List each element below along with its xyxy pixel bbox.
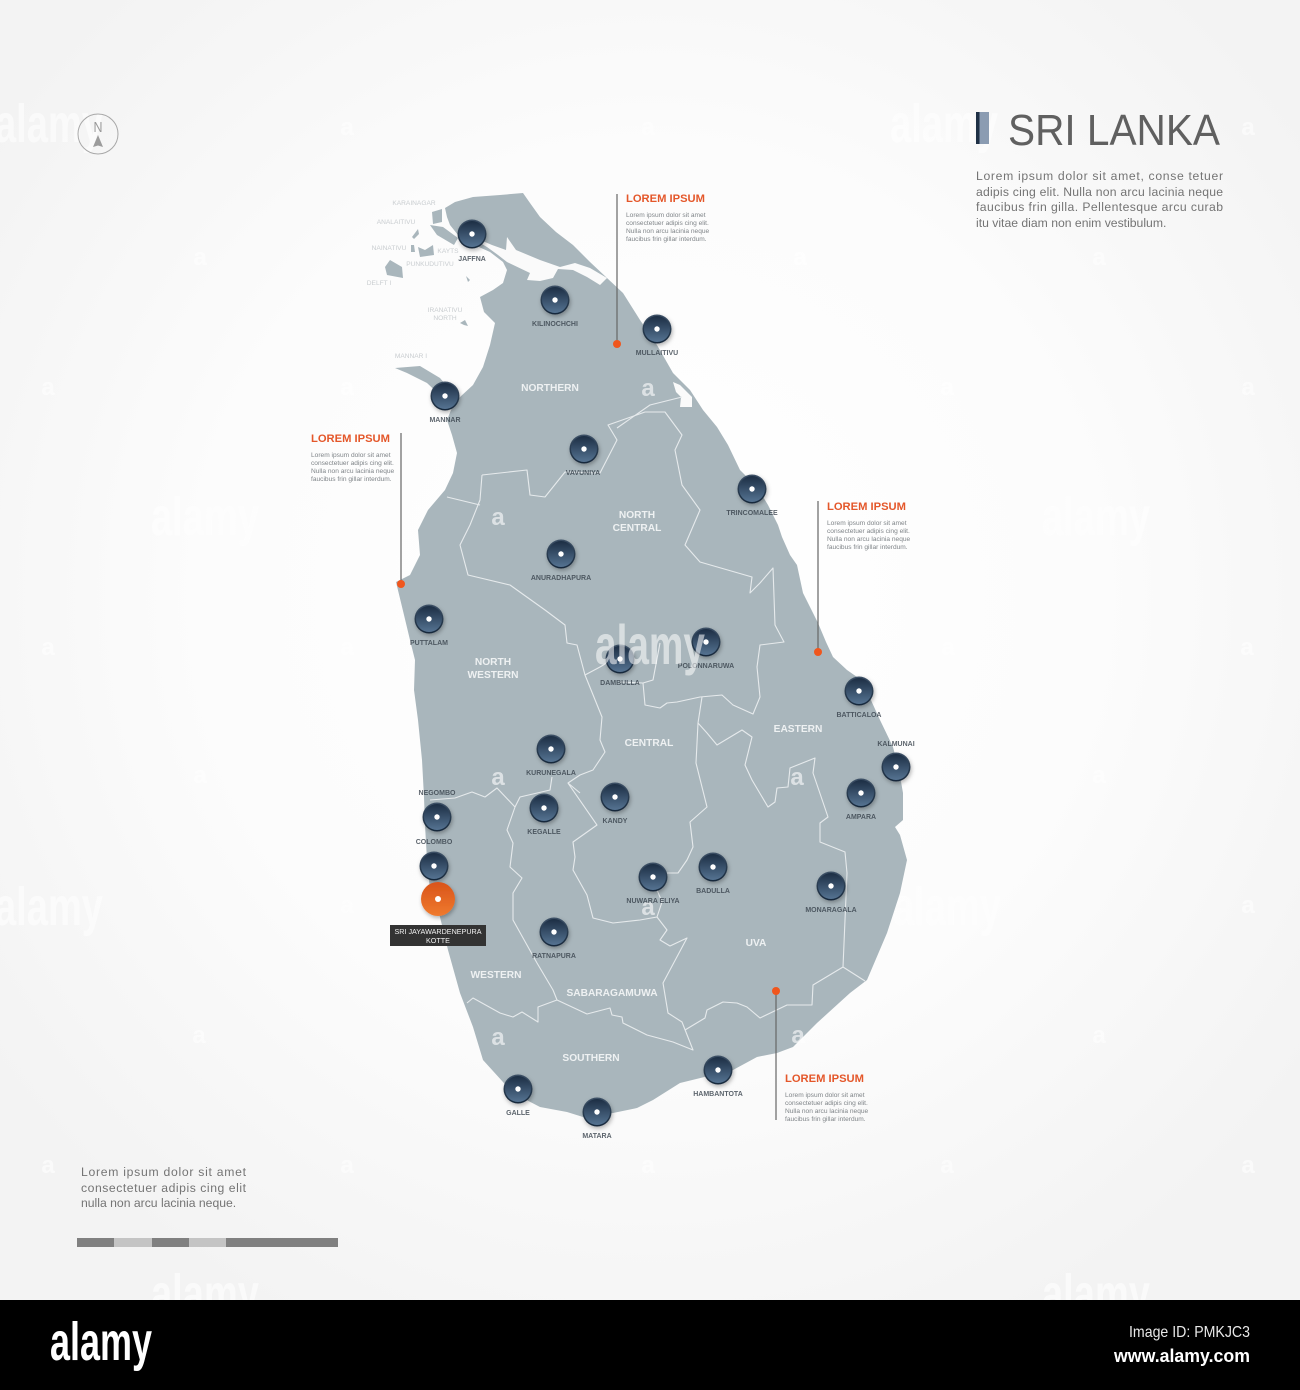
pin: Galle: GALLE — [506, 1110, 530, 1117]
callout: south: LOREM IPSUM — [785, 1073, 864, 1085]
watermarks on map: a — [790, 764, 804, 791]
region names: NORTH — [475, 657, 511, 668]
pin: Ratnapura — [532, 918, 576, 960]
watermarks on map: a — [491, 504, 505, 531]
watermarks: a — [941, 634, 955, 661]
callout: west — [311, 433, 405, 588]
pin: Kilinochchi: KILINOCHCHI — [532, 321, 578, 328]
region names: NORTHERN — [521, 383, 579, 394]
footnote text — [81, 1165, 247, 1210]
watermarks: a — [340, 892, 354, 919]
capital marker: Sri Jayawardenepura Kotte — [390, 882, 486, 946]
footer bar: Image ID: PMKJC3 — [1129, 1324, 1250, 1341]
watermarks on map: a — [491, 1024, 505, 1051]
pin: Mannar: MANNAR — [429, 417, 461, 424]
watermarks: alamy — [1042, 487, 1150, 547]
callout: east: Nulla non arcu lacinia neque — [827, 536, 911, 543]
footer bar — [0, 1300, 1300, 1390]
label: offshore island names: NORTH — [433, 315, 457, 322]
watermarks: a — [793, 244, 807, 271]
watermarks: alamy — [151, 1264, 259, 1324]
label: offshore island names: ANALAITIVU — [377, 219, 415, 226]
pin: Ampara — [846, 778, 876, 821]
intro text: adipis cing elit. Nulla non arcu lacinia neque — [976, 185, 1223, 199]
map: province borders — [430, 397, 865, 1050]
watermarks: a — [41, 374, 55, 401]
pin: Nuwara Eliya: NUWARA ELIYA — [626, 898, 680, 905]
pin: Dambulla: DAMBULLA — [600, 680, 640, 687]
label: offshore island names: KAYTS — [437, 248, 459, 255]
callout: south — [772, 987, 869, 1123]
pin: Batticaloa — [837, 676, 881, 719]
watermarks: a — [641, 114, 655, 141]
watermark over central map: alamy — [595, 613, 705, 676]
watermarks: alamy — [1042, 1264, 1150, 1324]
watermarks: a — [1092, 762, 1106, 789]
label: offshore island names: KARAINAGAR — [392, 200, 436, 207]
callout: north: Lorem ipsum dolor sit amet — [626, 212, 706, 219]
map: eastern lagoon — [673, 382, 692, 407]
callout: north: faucibus frin gillar interdum. — [626, 236, 707, 243]
watermarks: a — [340, 634, 354, 661]
watermarks: a — [1092, 244, 1106, 271]
callout: east — [814, 501, 911, 656]
capital marker: Sri Jayawardenepura Kotte: SRI JAYAWARDENEPURA — [394, 927, 482, 936]
region names: CENTRAL — [625, 738, 673, 749]
pin: Batticaloa: BATTICALOA — [837, 712, 881, 719]
callout: east: consectetuer adipis cing elit. — [827, 528, 910, 535]
watermarks: a — [340, 374, 354, 401]
watermarks: a — [193, 244, 207, 271]
watermarks: alamy — [890, 94, 998, 154]
footnote text: consectetuer adipis cing elit — [81, 1181, 247, 1195]
watermarks on map: a — [791, 1022, 805, 1049]
pin: Kalmunai: KALMUNAI — [877, 741, 915, 748]
pin: Kilinochchi — [532, 286, 578, 328]
callout: east: LOREM IPSUM — [827, 501, 906, 513]
pin: Kandy: KANDY — [603, 818, 628, 825]
watermarks: a — [1241, 1152, 1255, 1179]
compass: N — [94, 119, 102, 136]
pin: Anuradhapura: ANURADHAPURA — [531, 575, 591, 582]
callout: west: Lorem ipsum dolor sit amet — [311, 452, 391, 459]
callout: west: Nulla non arcu lacinia neque — [311, 468, 395, 475]
pin: Hambantota — [693, 1056, 743, 1098]
callout: north: consectetuer adipis cing elit. — [626, 220, 709, 227]
footnote text: nulla non arcu lacinia neque. — [81, 1196, 236, 1210]
watermarks: a — [340, 1152, 354, 1179]
pin: Badulla — [696, 852, 730, 895]
watermarks: a — [1241, 374, 1255, 401]
pin: Vavuniya: VAVUNIYA — [566, 470, 600, 477]
map: mainland and Jaffna peninsula — [396, 193, 907, 1117]
intro text — [976, 169, 1223, 230]
watermarks on map — [491, 375, 805, 1051]
callout: north: Nulla non arcu lacinia neque — [626, 228, 710, 235]
watermarks: a — [940, 1152, 954, 1179]
watermarks: a — [1241, 892, 1255, 919]
callout: south: faucibus frin gillar interdum. — [785, 1116, 866, 1123]
label: offshore island names — [367, 200, 463, 360]
capital marker: Sri Jayawardenepura Kotte: KOTTE — [426, 936, 450, 945]
pin: Mullaitivu — [636, 314, 678, 357]
map: lagoon — [458, 232, 607, 285]
region names — [468, 383, 822, 1064]
label: offshore island names: IRANATIVU — [428, 307, 463, 314]
pin: Hambantota: HAMBANTOTA — [693, 1091, 743, 1098]
pin: Kegalle — [527, 794, 561, 836]
region names: EASTERN — [774, 724, 822, 735]
pin: Mannar — [429, 382, 461, 424]
pin: Nuwara Eliya — [626, 862, 680, 905]
scale bar — [77, 1238, 338, 1247]
watermarks: a — [41, 634, 55, 661]
watermarks: a — [641, 1152, 655, 1179]
compass — [78, 114, 118, 154]
pin: Polonnaruwa — [678, 628, 734, 670]
pin: Kandy — [600, 782, 630, 825]
map: islands — [385, 209, 470, 400]
watermarks: a — [1092, 1022, 1106, 1049]
callout: south: Nulla non arcu lacinia neque — [785, 1108, 869, 1115]
watermarks on map: a — [641, 894, 655, 921]
pin: Negombo — [419, 790, 456, 832]
watermarks: a — [41, 1152, 55, 1179]
pin: Colombo — [416, 839, 453, 880]
region names: WESTERN — [468, 670, 518, 681]
footer bar: alamy — [50, 1312, 152, 1372]
callout: west: LOREM IPSUM — [311, 433, 390, 445]
pin: Polonnaruwa: POLONNARUWA — [678, 663, 734, 670]
pin: Matara — [582, 1098, 612, 1140]
label: offshore island names: NAINATIVU — [372, 245, 407, 252]
footer bar: www.alamy.com — [1113, 1346, 1250, 1366]
watermarks: a — [193, 762, 207, 789]
watermarks: a — [1240, 634, 1254, 661]
intro text: Lorem ipsum dolor sit amet, conse tetuer — [976, 169, 1223, 183]
label: offshore island names: PUNKUDUTIVU — [406, 261, 454, 268]
pin: Galle — [504, 1074, 532, 1117]
region names: NORTH — [619, 510, 655, 521]
callout: south: Lorem ipsum dolor sit amet — [785, 1092, 865, 1099]
intro text: itu vitae diam non enim vestibulum. — [976, 216, 1166, 230]
pin: Negombo: NEGOMBO — [419, 790, 456, 797]
pin: Trincomalee — [726, 474, 778, 517]
pin: Badulla: BADULLA — [696, 888, 730, 895]
pin: Monaragala: MONARAGALA — [805, 907, 857, 914]
callout: north: LOREM IPSUM — [626, 193, 705, 205]
label: offshore island names: DELFT I — [367, 280, 391, 287]
watermarks on map: a — [491, 764, 505, 791]
footnote text: Lorem ipsum dolor sit amet — [81, 1165, 247, 1179]
watermarks on map: a — [641, 375, 655, 402]
region names: CENTRAL — [613, 523, 661, 534]
pin: Ratnapura: RATNAPURA — [532, 953, 576, 960]
map of Sri Lanka — [385, 193, 907, 1117]
region names: UVA — [746, 938, 767, 949]
pin: Kurunegala — [526, 734, 576, 777]
pin: Mullaitivu: MULLAITIVU — [636, 350, 678, 357]
region names: WESTERN — [471, 970, 521, 981]
pin: Jaffna: JAFFNA — [458, 256, 486, 263]
label: offshore island names: MANNAR I — [395, 353, 427, 360]
pin: Anuradhapura — [531, 540, 591, 582]
watermarks: a — [940, 374, 954, 401]
region names: SABARAGAMUWA — [566, 988, 658, 999]
pin: Puttalam: PUTTALAM — [410, 640, 448, 647]
watermarks: a — [1241, 114, 1255, 141]
city pins — [410, 220, 915, 1140]
pin: Colombo: COLOMBO — [416, 839, 453, 846]
pin: Dambulla — [600, 644, 640, 687]
pin: Monaragala — [805, 872, 857, 914]
watermarks: a — [192, 1022, 206, 1049]
watermarks: alamy — [893, 877, 1001, 937]
pin: Jaffna — [458, 220, 486, 263]
callout: west: faucibus frin gillar interdum. — [311, 476, 392, 483]
callout: east: faucibus frin gillar interdum. — [827, 544, 908, 551]
watermarks: alamy — [151, 487, 259, 547]
callout: east: Lorem ipsum dolor sit amet — [827, 520, 907, 527]
intro text: faucibus frin gilla. Pellentesque arcu curab — [976, 200, 1223, 214]
pin: Ampara: AMPARA — [846, 814, 876, 821]
callout: west: consectetuer adipis cing elit. — [311, 460, 394, 467]
pin: Kurunegala: KURUNEGALA — [526, 770, 576, 777]
callout: north — [613, 193, 710, 348]
pin: Trincomalee: TRINCOMALEE — [726, 510, 778, 517]
watermarks: a — [340, 114, 354, 141]
title: SRI LANKA — [1008, 106, 1221, 155]
callout: south: consectetuer adipis cing elit. — [785, 1100, 868, 1107]
pin: Puttalam — [410, 604, 448, 647]
region names: SOUTHERN — [562, 1053, 620, 1064]
pin: Matara: MATARA — [582, 1133, 612, 1140]
pin: Kegalle: KEGALLE — [527, 829, 561, 836]
pin: Kalmunai — [877, 741, 915, 782]
pin: Vavuniya — [566, 434, 600, 477]
